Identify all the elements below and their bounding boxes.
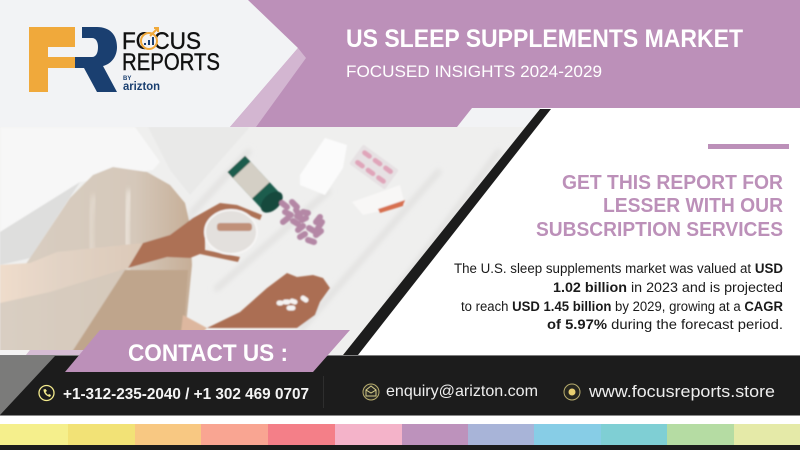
upper hand xyxy=(128,203,262,268)
phone numbers: +1-312-235-2040 / +1 302 469 0707 xyxy=(63,386,309,403)
market summary paragraph: 1.02 billion in 2023 and is projected xyxy=(553,280,783,295)
market summary paragraph: to reach USD 1.45 billion by 2029, growing at a CAGR xyxy=(461,299,783,314)
logo: BY xyxy=(123,76,131,82)
email address: enquiry@arizton.com xyxy=(386,383,538,400)
subtitle: FOCUSED INSIGHTS 2024-2029 xyxy=(346,62,602,81)
market summary paragraph xyxy=(454,261,783,332)
email icon xyxy=(363,384,379,400)
logo: arizton xyxy=(123,79,160,93)
header panel xyxy=(0,0,800,127)
market summary paragraph: The U.S. sleep supplements market was valued at USD xyxy=(454,261,783,276)
call-to-action heading xyxy=(536,172,784,241)
green bottle xyxy=(227,155,287,217)
arm xyxy=(0,243,143,303)
pink capsules xyxy=(282,202,322,242)
call-to-action heading: SUBSCRIPTION SERVICES xyxy=(536,219,783,241)
glass of water xyxy=(205,210,257,254)
contact bar xyxy=(0,355,800,416)
white strip below photo xyxy=(0,350,30,355)
contact us banner xyxy=(65,330,350,372)
market summary paragraph: of 5.97% during the forecast period. xyxy=(547,317,783,332)
contact us banner: CONTACT US : xyxy=(128,340,288,367)
title: US SLEEP SUPPLEMENTS MARKET xyxy=(346,25,743,53)
call-to-action heading: GET THIS REPORT FOR xyxy=(562,172,784,194)
website address: www.focusreports.store xyxy=(588,382,775,401)
accent bar xyxy=(708,144,789,149)
website icon xyxy=(564,384,580,400)
logo: FOCUS xyxy=(122,28,201,55)
accent strip xyxy=(26,350,88,355)
logo xyxy=(29,27,220,93)
phone icon xyxy=(39,386,54,400)
white bottle xyxy=(300,138,347,195)
colour strip xyxy=(0,424,800,450)
tube xyxy=(354,187,404,214)
blanket xyxy=(0,167,192,355)
lower hand xyxy=(207,273,330,328)
pillow xyxy=(0,127,160,232)
diagonal black band xyxy=(343,109,551,355)
call-to-action heading: LESSER WITH OUR xyxy=(603,195,784,217)
photo: hands with supplements on a bed xyxy=(0,127,530,355)
logo: REPORTS xyxy=(122,49,220,76)
blister pack xyxy=(349,144,399,190)
